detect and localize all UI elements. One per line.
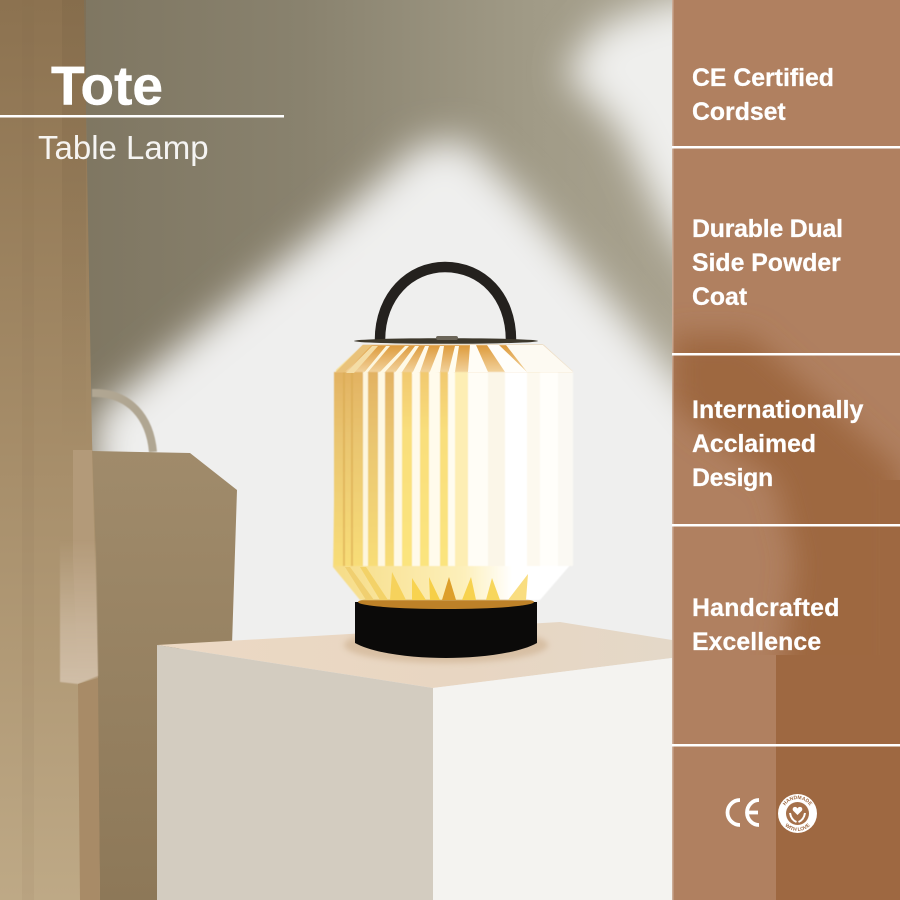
lamp lid (354, 336, 538, 344)
feature: acclaimed design: Design (692, 465, 773, 492)
feature: handcrafted: Handcrafted (692, 595, 840, 622)
pedestal right face (433, 658, 672, 900)
icon: handmade with love badge (778, 794, 817, 833)
feature: CE certified: Cordset (692, 99, 786, 126)
icon: handmade with love badge: WITH LOVE (786, 823, 810, 831)
lamp base (344, 595, 548, 663)
pedestal left face (157, 645, 433, 900)
subtitle: Table Lamp (38, 129, 209, 166)
pedestal (157, 622, 672, 900)
background wall (84, 0, 672, 640)
icon: handmade with love badge: HANDMADE (782, 796, 812, 806)
curtain (0, 0, 100, 900)
feature: CE certified: CE Certified (692, 65, 834, 92)
feature: powder coat: Coat (692, 284, 747, 311)
feature: acclaimed design: Acclaimed (692, 431, 816, 458)
feature: powder coat: Durable Dual (692, 216, 843, 243)
title: Tote (51, 54, 163, 116)
feature: acclaimed design: Internationally (692, 397, 864, 424)
feature: powder coat: Side Powder (692, 250, 841, 277)
title underline (0, 115, 284, 118)
panel: features background (672, 0, 900, 900)
lamp shade bottom folds (345, 567, 528, 600)
divider rows (672, 146, 900, 746)
lamp shade top folds (336, 345, 573, 374)
lamp shade pleats (333, 345, 573, 600)
pedestal top (157, 622, 672, 688)
feature: handcrafted: Excellence (692, 629, 821, 656)
lamp shadow on wall (92, 393, 237, 900)
lamp (333, 267, 573, 663)
icon: CE mark (727, 800, 759, 825)
lamp handle (380, 267, 511, 340)
